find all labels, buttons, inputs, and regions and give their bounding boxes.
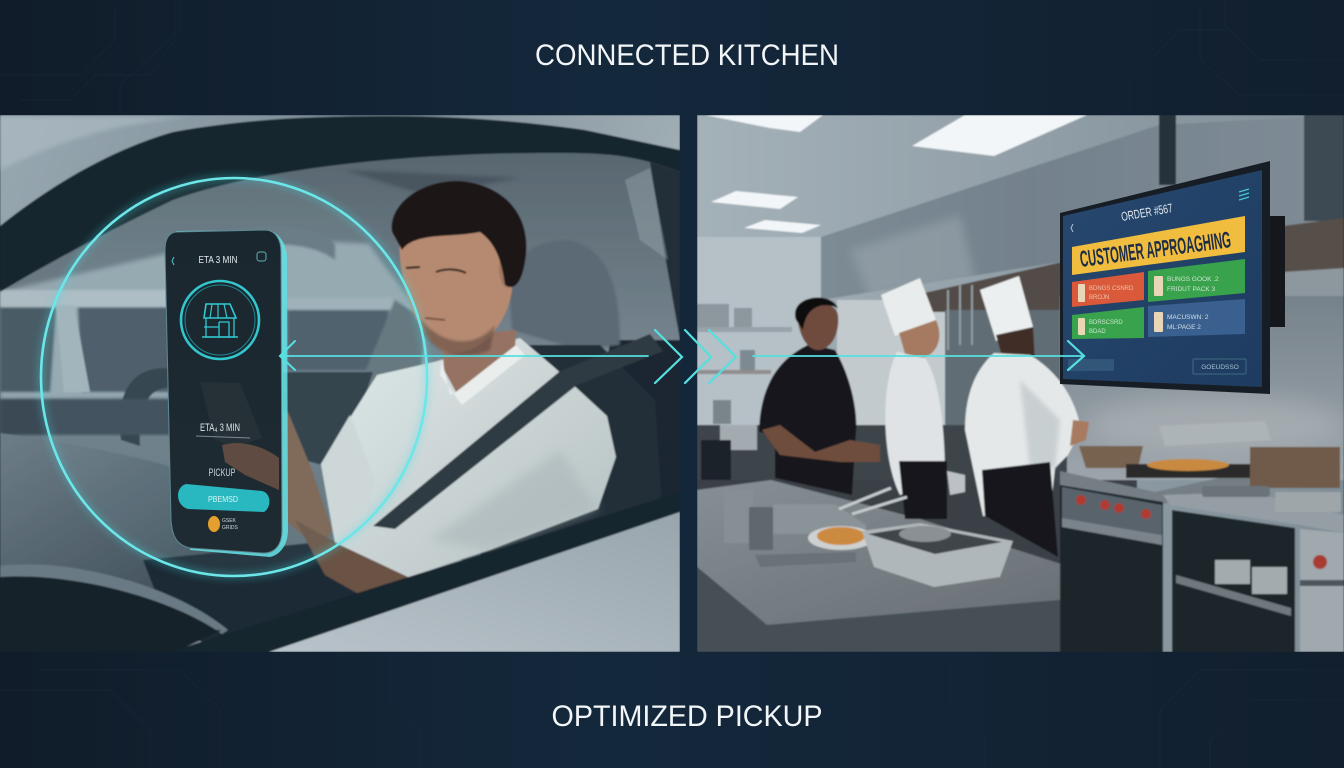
header badge icon	[257, 252, 266, 261]
right cabin dark	[608, 339, 680, 498]
phone glow edge	[176, 230, 288, 557]
monitor frame	[1060, 161, 1270, 394]
status tile: blue: MACUSWN: 2	[1167, 314, 1209, 321]
brand badge	[208, 516, 238, 532]
eye brows	[406, 267, 466, 273]
lower left button	[1068, 359, 1114, 371]
status tile: blue: ML:PAGE 2	[1167, 324, 1201, 331]
door panel	[269, 512, 680, 652]
counter side shadow	[697, 480, 1137, 652]
status tile: red	[1072, 272, 1144, 307]
dark back counter	[697, 425, 1067, 495]
status tile: green two: BDAD	[1089, 329, 1106, 335]
hood highlight	[850, 215, 975, 300]
hood filter right	[1283, 218, 1344, 276]
roof highlight	[0, 116, 166, 170]
left arrow head	[280, 341, 295, 370]
counter front	[697, 567, 1130, 652]
ceiling lights	[705, 115, 1087, 233]
status tile: green two	[1072, 307, 1144, 339]
hand on phone	[288, 411, 332, 538]
beard shadow	[420, 318, 495, 356]
status tile: red: BROJN	[1089, 295, 1109, 301]
back chevron icon	[172, 257, 174, 265]
headrest	[509, 240, 620, 350]
car exterior and roof	[0, 115, 680, 652]
white tile side	[837, 300, 947, 425]
status tile: green one	[1148, 259, 1245, 302]
teal pickup button	[178, 484, 269, 512]
status tile: green one: BUNGS GOOK .2	[1167, 276, 1219, 283]
rear seat and cabin dark area	[282, 372, 373, 470]
status tile: green two: BDRSCSRD	[1089, 320, 1123, 326]
eta underline	[196, 436, 250, 438]
collar and neck	[442, 330, 516, 392]
kitchen ceiling	[697, 115, 1344, 652]
monitor title: ORDER #567	[1120, 201, 1174, 224]
teal pickup button: PBEMSD	[208, 495, 238, 504]
menu icon	[1239, 189, 1249, 200]
hanging utensils	[948, 285, 972, 350]
chef two	[965, 276, 1089, 557]
right pillar	[650, 162, 680, 340]
back icon	[1071, 224, 1073, 232]
grill food and pans	[1079, 421, 1341, 512]
parked car seen through window	[0, 307, 56, 392]
steel back wall	[945, 310, 1065, 440]
teal halo circle	[41, 178, 427, 576]
brand badge: GSEK	[222, 518, 237, 524]
main steel counter	[697, 480, 1130, 625]
arrow line driver	[280, 355, 648, 357]
panel: driver in car	[0, 115, 680, 652]
forearm below sleeve	[296, 521, 408, 594]
door frame arc	[0, 116, 680, 292]
grab handle	[282, 240, 336, 260]
lower right button	[1193, 359, 1246, 374]
ear	[499, 262, 510, 288]
panel: kitchen	[697, 115, 1344, 652]
hood wall	[821, 115, 1344, 300]
steering wheel	[120, 368, 168, 446]
store icon in ring	[181, 281, 259, 359]
oven range	[1060, 471, 1265, 652]
phone header eta: ETA 3 MIN	[198, 254, 238, 266]
phone body	[165, 230, 282, 553]
inner door pillar	[365, 300, 425, 395]
status tile: red: BDNGS CSNRD	[1089, 286, 1134, 292]
right arrow head	[1068, 341, 1084, 370]
wall monitor	[1060, 161, 1285, 394]
shelves	[697, 304, 792, 424]
shirt shadow fold	[430, 450, 598, 550]
lower right button: GOEUDSSO	[1201, 364, 1239, 371]
dashboard	[0, 432, 220, 590]
rear window	[0, 242, 425, 399]
brand badge: GRIDS	[222, 525, 238, 531]
lower door dark band	[169, 492, 680, 652]
lower cabin dark	[142, 540, 358, 643]
phone eta label: ETA₄ 3 MIN	[200, 422, 240, 434]
seat belt	[373, 334, 663, 529]
status tile: green one: FRIDUT PACK 3	[1167, 286, 1216, 293]
phone with halo	[41, 178, 427, 576]
monitor mount	[1270, 216, 1285, 327]
headliner shadow strip	[352, 170, 512, 192]
footer: optimized pickup: OPTIMIZED PICKUP	[552, 700, 822, 733]
man torso white shirt	[346, 337, 618, 578]
seat	[480, 344, 618, 555]
tiled back wall	[697, 237, 821, 430]
reflected hand on phone	[200, 382, 262, 447]
ceiling pole	[1159, 115, 1176, 185]
status tile: blue	[1148, 299, 1245, 337]
monitor screen	[1063, 170, 1262, 387]
staff in black polo	[759, 298, 880, 495]
sleeve	[322, 414, 352, 462]
chef one	[881, 278, 965, 519]
steel wall right with steam	[1060, 296, 1344, 480]
title: connected kitchen: CONNECTED KITCHEN	[535, 39, 839, 72]
interior headliner	[0, 149, 680, 560]
lower wheel arc	[0, 576, 213, 631]
pickup label: PICKUP	[208, 467, 236, 479]
right counter	[1163, 492, 1344, 652]
lips	[425, 318, 445, 320]
face	[398, 230, 513, 352]
connection line and arrows	[280, 330, 1084, 383]
hair	[392, 181, 526, 287]
dash band	[0, 399, 170, 435]
steel containers on counter	[724, 488, 1013, 587]
yellow banner	[1072, 216, 1245, 275]
arrow line kitchen	[753, 355, 1083, 357]
hood filter left	[924, 262, 1062, 312]
chevrons in gutter	[655, 330, 736, 383]
dark upper right	[1304, 115, 1344, 221]
